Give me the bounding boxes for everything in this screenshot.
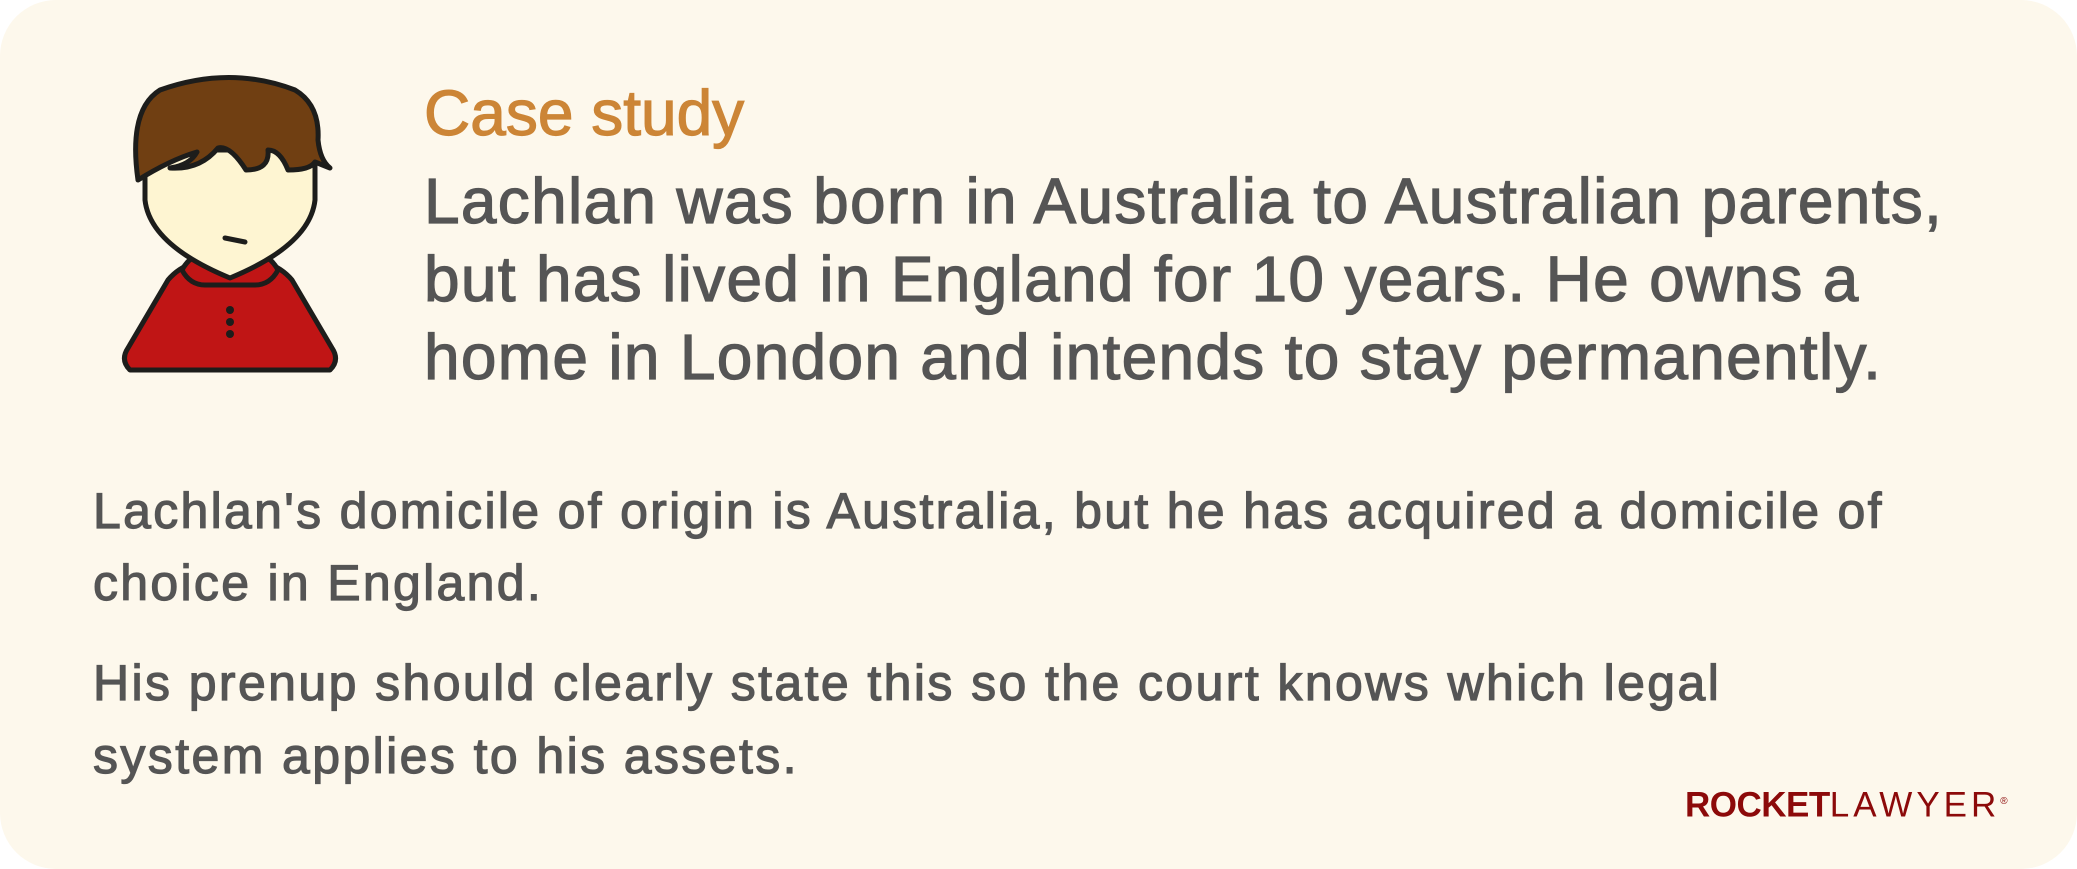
text block: case summary: Lachlan was born in Australia to Australian parents, <box>424 165 1943 237</box>
text block: domicile explanation <box>93 483 1884 612</box>
logo: Rocket Lawyer: ROCKETLAWYER® <box>1685 786 2009 825</box>
text block: case summary <box>424 165 1943 394</box>
text block: domicile explanation: choice in England. <box>93 555 543 611</box>
text block: prenup advice: system applies to his assets. <box>93 728 799 784</box>
icon: avatar man <box>122 75 338 372</box>
text block: case summary: but has lived in England for 10 years. He owns a <box>424 243 1860 315</box>
text block: case summary: home in London and intends to stay permanently. <box>424 321 1882 393</box>
heading: Case study: Case study <box>424 77 744 149</box>
text block: prenup advice <box>93 655 1721 784</box>
text block: prenup advice: His prenup should clearly state this so the court knows which legal <box>93 655 1721 711</box>
text block: domicile explanation: Lachlan's domicile of origin is Australia, but he has acquired a domicile of <box>93 483 1884 539</box>
